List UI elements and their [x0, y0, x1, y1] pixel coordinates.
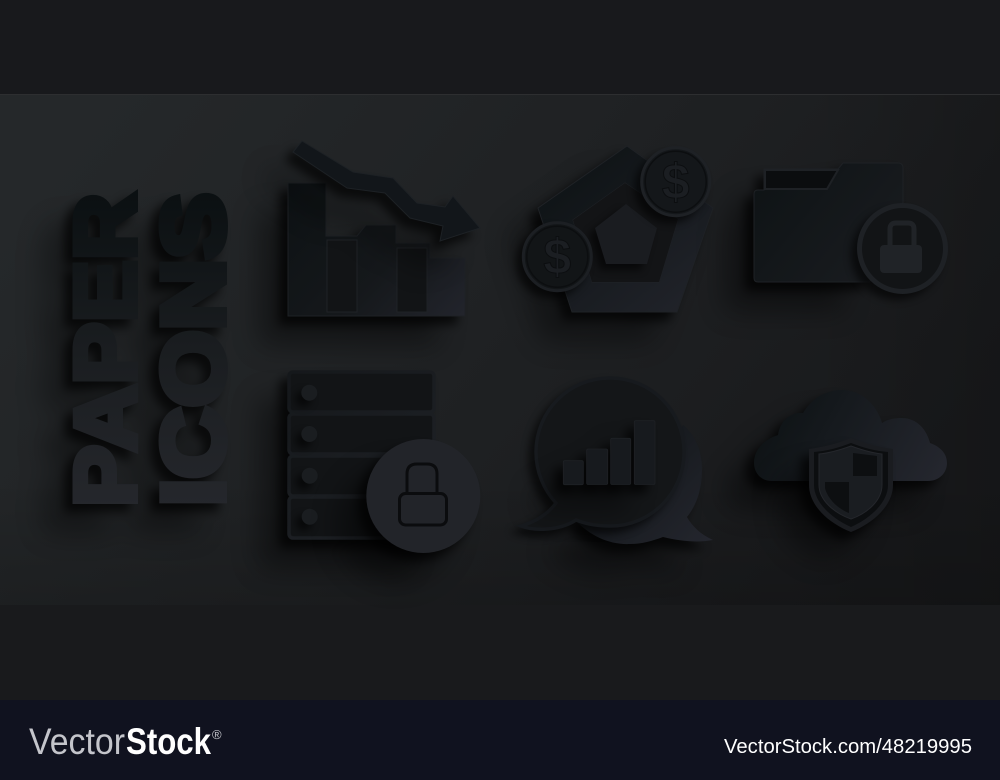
folder body: [754, 163, 903, 282]
dollar coin top right: [642, 148, 710, 216]
dollar coin bottom left: $: [543, 229, 571, 285]
icon: speech bubble with rising bars: [521, 378, 713, 544]
brand logo: VectorStock: [29, 721, 222, 762]
rear bubble: [575, 425, 713, 544]
word: PAPER: PAPER: [58, 193, 154, 507]
center pentagon: [595, 204, 657, 264]
footer bar: [0, 700, 1000, 780]
bar recess left: [327, 240, 357, 312]
server rows: [289, 372, 434, 538]
image reference URL: VectorStock.com/48219995: [724, 736, 972, 758]
icon: cloud with security shield: [754, 390, 947, 532]
outer pentagon frame: [538, 146, 713, 312]
brand logo: VectorStock: ®: [212, 727, 222, 742]
icon: pentagon with dollar coins: [523, 146, 713, 312]
front bubble: [521, 378, 684, 529]
lock circle: [860, 206, 946, 292]
icon: folder with padlock: [754, 163, 946, 292]
signal bars: [563, 421, 655, 485]
server status dots: [301, 385, 318, 525]
dollar coin bottom left: [523, 223, 591, 291]
central dark panel: [0, 94, 1000, 605]
brand logo: VectorStock: Vector: [29, 721, 125, 762]
shield quadrant top right: [853, 453, 877, 476]
dollar coin top right: $: [662, 154, 690, 210]
padlock outline: [400, 464, 446, 525]
brand logo: VectorStock: Stock: [126, 721, 211, 762]
icon: server rack with padlock: [289, 372, 480, 553]
bar recess right: [397, 248, 427, 312]
word: ICONS: ICONS: [144, 193, 242, 506]
shield quadrant bottom left: [825, 482, 849, 513]
lock disc: [366, 439, 480, 553]
icon: falling bar chart with arrow: [288, 141, 480, 316]
heading: PAPER ICONS vertical lettering: [58, 193, 242, 507]
cloud: [754, 390, 947, 481]
folder tab recess: [765, 170, 838, 189]
lower background band: [0, 605, 1000, 700]
inner recess: [573, 183, 678, 282]
chart bars: [288, 183, 465, 316]
top background band: [0, 0, 1000, 94]
shield outer: [809, 438, 893, 532]
falling arrow: [293, 141, 480, 241]
shield inner: [819, 446, 882, 519]
shield recess ring: [814, 443, 888, 527]
padlock: [880, 223, 922, 273]
